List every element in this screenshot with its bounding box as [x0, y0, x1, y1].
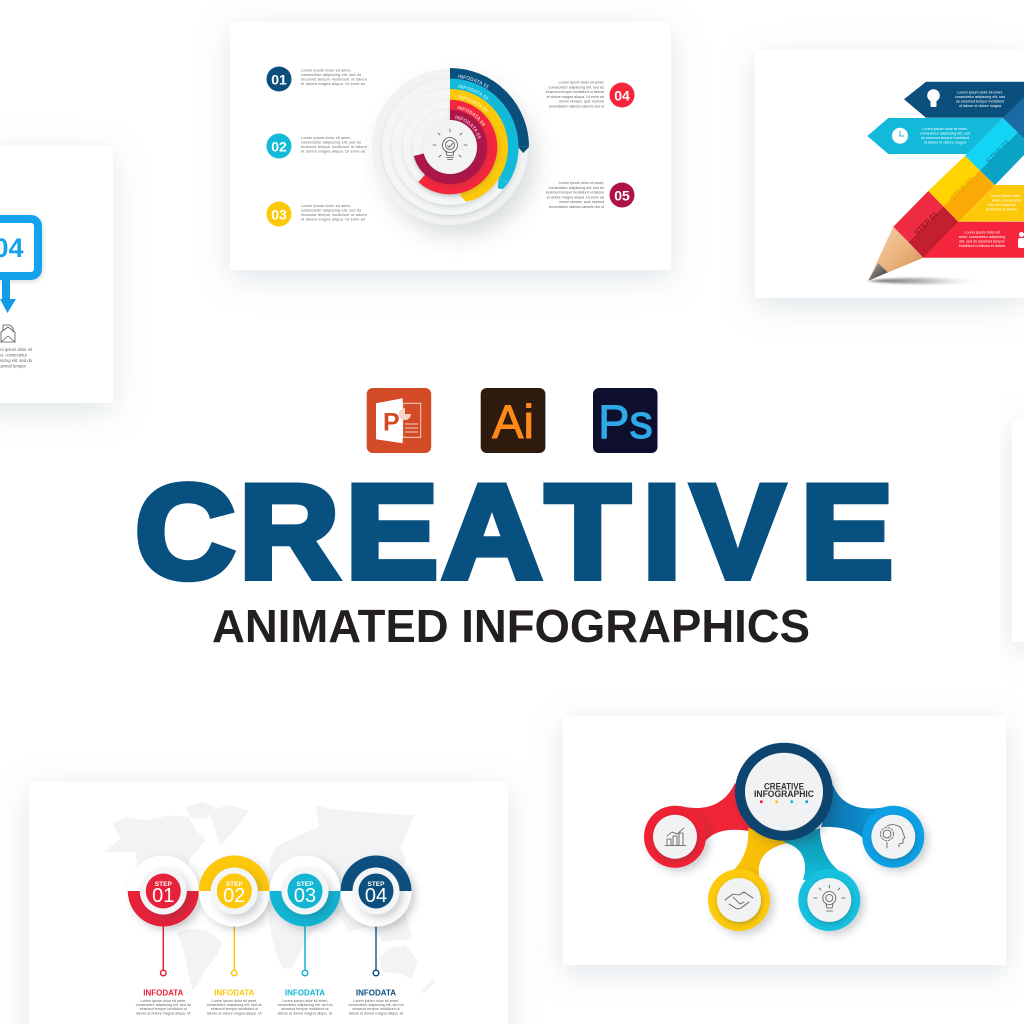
pencil segment: yellow, step 02	[928, 156, 995, 222]
text block 02	[301, 136, 367, 154]
text block 04: eiusmod tempor incididunt ut labore	[546, 90, 604, 94]
connector: red	[680, 783, 762, 850]
arc: infodata 01: INFODATA 01	[458, 74, 489, 89]
hub label: CREATIVE	[764, 782, 804, 792]
concentric discs	[372, 69, 528, 225]
banner: yellow: amet, consectetur	[992, 198, 1022, 202]
step 04: consectetur adipiscing elit, sed do	[348, 1003, 404, 1007]
step 02: consectetur adipiscing elit, sed do	[207, 1003, 262, 1007]
banner: red: amet, consectetur adipiscing	[959, 235, 1005, 239]
step 01: consectetur adipiscing elit, sed do	[136, 1003, 191, 1007]
banner: red: elit, sed do eiusmod tempor	[959, 240, 1005, 244]
banner: cyan: consectetur adipiscing elit, sed	[920, 132, 970, 136]
step 03: STEP	[297, 881, 314, 888]
text block 02: eiusmod tempor incididunt ut labore	[301, 145, 367, 149]
step 03: INFODATA	[285, 988, 325, 998]
banner: red: Lorem ipsum dolor sit	[964, 230, 1000, 234]
text block 05: minim veniam, quis nostrud	[559, 200, 604, 204]
pencil segment: red, step 01: STEP 01	[912, 210, 940, 237]
app icon: Illustrator	[481, 388, 545, 453]
panel: concentric circles infographic	[220, 20, 681, 288]
arc: infodata 03: INFODATA 03	[458, 95, 488, 113]
step 02: 02	[223, 885, 245, 907]
connector: cyan	[783, 828, 850, 880]
app icon: Photoshop: Ps	[598, 395, 653, 448]
arc: infodata 01	[450, 68, 529, 153]
text block 04: Lorem ipsum dolor sit amet,	[558, 80, 604, 84]
step badge 01	[266, 66, 292, 92]
step badge 05: 05	[614, 188, 630, 204]
banner: cyan: Lorem ipsum dolor sit amet,	[922, 127, 968, 131]
banner: navy: Lorem ipsum dolor sit amet,	[957, 90, 1003, 94]
step 04: eiusmod tempor incididunt ut	[352, 1007, 400, 1011]
step 04	[340, 856, 412, 1016]
step badge 01: 01	[271, 72, 287, 88]
step 03	[270, 856, 340, 1016]
text block 05	[546, 181, 604, 209]
pencil segment: cyan, step 03: STEP 03	[984, 138, 1012, 165]
icon: light bulb	[927, 89, 940, 107]
text block 03	[301, 204, 367, 222]
banner: red	[923, 222, 1024, 258]
panel: far right cropped card	[1012, 420, 1024, 642]
step 01: STEP	[155, 881, 172, 888]
pencil shadow	[868, 278, 992, 284]
pencil tip	[868, 227, 923, 281]
banner: navy: do eiusmod tempor incididunt	[956, 100, 1004, 104]
step 04: labore et dolore magna aliqua. Ut	[349, 1012, 403, 1016]
text block 05: eiusmod tempor incididunt ut labore	[546, 191, 604, 195]
center hub	[735, 743, 833, 841]
arc: infodata 05	[414, 110, 490, 188]
text block 01: consectetur adipiscing elit, sed do	[301, 73, 361, 77]
text block 03: eiusmod tempor incididunt ut labore	[301, 213, 367, 217]
step 01: INFODATA	[143, 988, 184, 998]
step 01: labore et dolore magna aliqua. Ut	[136, 1012, 191, 1016]
banner: cyan: do eiusmod tempor incididunt	[921, 136, 969, 140]
step 04: Lorem ipsum dolor sit amet,	[353, 999, 399, 1003]
step 02	[199, 856, 270, 1016]
banner: yellow: Lorem ipsum dolor	[990, 194, 1021, 198]
step 03: 03	[294, 885, 316, 907]
text block 01	[301, 68, 367, 86]
step badge 04: 04	[614, 88, 630, 104]
hub label	[754, 782, 814, 800]
step 04: INFODATA	[356, 988, 396, 998]
text block 02: Lorem ipsum dolor sit amet,	[301, 136, 351, 140]
arc: infodata 05: INFODATA 05	[455, 115, 481, 139]
node: blue head and gear	[862, 806, 924, 868]
step badge 05	[610, 182, 634, 208]
panel: speech-box infographic, cropped	[0, 146, 113, 403]
node: red chart	[644, 806, 706, 868]
banner: navy	[904, 82, 1024, 118]
panel: hub infographic	[563, 716, 1006, 965]
step 04: STEP	[368, 881, 385, 888]
step badge 02: 02	[271, 138, 287, 154]
text block 02: et dolore magna aliqua. Ut enim ad	[301, 150, 365, 154]
arc: infodata 04: INFODATA 04	[457, 106, 486, 126]
text block 03: consectetur adipiscing elit, sed do	[301, 208, 361, 212]
step 02: STEP	[226, 881, 243, 888]
text block 04: minim veniam, quis nostrud	[559, 100, 604, 104]
connector: blue	[821, 785, 890, 843]
text block 03: Lorem ipsum dolor sit amet,	[301, 204, 351, 208]
banner: navy: consectetur adipiscing elit, sed	[955, 95, 1005, 99]
subtitle: ANIMATED INFOGRAPHICS	[212, 600, 810, 652]
step 02: labore et dolore magna aliqua. Ut	[207, 1012, 262, 1016]
text block 03: et dolore magna aliqua. Ut enim ad	[301, 218, 365, 222]
number box 04	[0, 219, 38, 276]
text block 04	[546, 80, 604, 108]
connector: yellow	[722, 828, 792, 880]
step badge 02	[266, 134, 292, 158]
app icon: PowerPoint: P	[383, 408, 400, 436]
text block 01: eiusmod tempor incididunt ut labore	[301, 78, 367, 82]
pencil segment: yellow, step 02: STEP 02	[948, 176, 975, 203]
step 02: INFODATA	[214, 988, 255, 998]
icon: person	[1018, 232, 1024, 248]
panel: pencil infographic	[755, 50, 1024, 298]
step 02: Lorem ipsum dolor sit amet,	[212, 999, 257, 1003]
step 01: 01	[152, 885, 174, 907]
banner: yellow	[958, 185, 1024, 222]
app icon: PowerPoint	[367, 388, 431, 453]
text block 02: consectetur adipiscing elit, sed do	[301, 140, 361, 144]
banner: cyan: ut labore et dolore magna	[924, 140, 967, 144]
banner: red: incididunt ut labore et dolore	[959, 244, 1005, 248]
step 04: 04	[365, 885, 387, 907]
icon: clock	[892, 128, 908, 144]
arc: infodata 02	[450, 78, 518, 190]
title: CREATIVE	[135, 457, 893, 606]
arc: infodata 04	[418, 100, 500, 198]
node: cyan bulb	[798, 869, 860, 931]
text block 05: Lorem ipsum dolor sit amet,	[558, 181, 604, 185]
center disc with bulb icon	[423, 120, 477, 174]
banner: cyan	[867, 118, 1003, 154]
world map	[104, 802, 436, 993]
text block 01: Lorem ipsum dolor sit amet,	[301, 68, 351, 72]
text block 01: et dolore magna aliqua. Ut enim ad	[301, 82, 365, 86]
arc: infodata 03	[450, 89, 508, 202]
text block 05: consectetur adipiscing elit, sed do	[549, 186, 604, 190]
step badge 03	[266, 202, 292, 226]
text block 04: consectetur adipiscing elit, sed do	[549, 85, 604, 89]
text block	[0, 347, 33, 368]
step 01: Lorem ipsum dolor sit amet,	[141, 999, 186, 1003]
hub label: INFOGRAPHIC	[754, 789, 814, 800]
pencil segment: navy	[1003, 97, 1024, 138]
app icon: Photoshop	[593, 388, 658, 453]
step 02: eiusmod tempor incididunt ut	[211, 1007, 258, 1011]
text block 04: et dolore magna aliqua. Ut enim ad	[547, 95, 604, 99]
banner: yellow: elit, sed eiusmod	[988, 203, 1016, 207]
step 01: eiusmod tempor incididunt ut	[140, 1007, 187, 1011]
banner: yellow: incididunt ut labore	[986, 208, 1017, 212]
step badge 04	[610, 82, 634, 108]
step 03: consectetur adipiscing elit, sed do	[277, 1003, 333, 1007]
pencil segment: cyan, step 03	[965, 118, 1024, 185]
icon: envelope	[1, 325, 15, 342]
text block 05: et dolore magna aliqua. Ut enim ad	[547, 195, 604, 199]
step 03: eiusmod tempor incididunt ut	[281, 1007, 329, 1011]
node: yellow handshake	[708, 869, 770, 931]
step 03: Lorem ipsum dolor sit amet,	[282, 999, 328, 1003]
hub dots	[760, 800, 808, 803]
app icon: Illustrator: Ai	[492, 395, 534, 448]
arrow	[0, 280, 16, 313]
arc: infodata 02: INFODATA 02	[458, 84, 488, 100]
pencil segment: red, step 01	[893, 191, 958, 258]
text block 05: exercitation ullamco laboris nisi ut	[549, 205, 604, 209]
step 03: labore et dolore magna aliqua. Ut	[278, 1012, 332, 1016]
text block 04: exercitation ullamco laboris nisi ut	[549, 104, 604, 108]
panel: step timeline infographic	[29, 782, 508, 1024]
step badge 03: 03	[271, 206, 287, 222]
banner: navy: ut labore et dolore magna	[959, 104, 1002, 108]
step 01	[128, 856, 199, 1016]
